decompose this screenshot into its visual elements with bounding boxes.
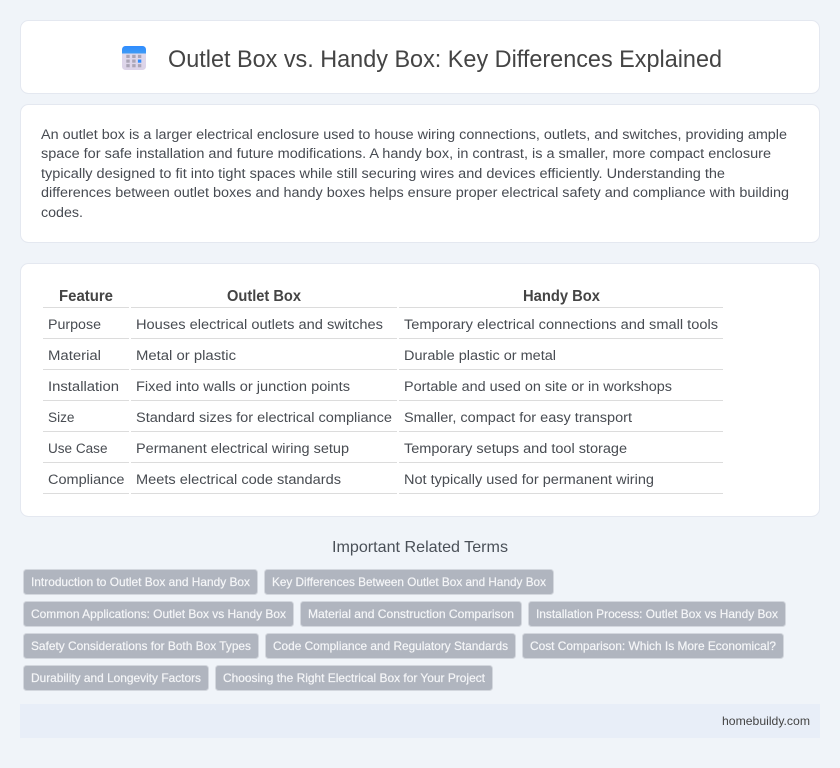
text block: introduction paragraph: An outlet box is a larger electrical enclosure used to house wiring connections, outlets, and switches, providing ample <box>41 127 787 143</box>
tag <box>24 602 294 626</box>
table row: purpose: Temporary electrical connections and small tools <box>404 317 718 333</box>
title: Outlet Box vs. Handy Box: Key Differences Explained <box>168 46 722 73</box>
panel: comparison table <box>20 264 820 516</box>
tag: Code Compliance and Regulatory Standards <box>273 639 508 653</box>
tag: Installation Process: Outlet Box vs Handy Box <box>536 607 778 621</box>
table row: size: Standard sizes for electrical compliance <box>136 410 392 426</box>
tag <box>24 570 258 594</box>
tag: Material and Construction Comparison <box>308 607 514 621</box>
table row: use case: Use Case <box>48 441 108 457</box>
table row: material <box>48 348 556 364</box>
tag <box>216 666 492 690</box>
table row: installation: Portable and used on site or in workshops <box>404 379 672 395</box>
related terms tags <box>24 570 786 690</box>
table row: material: Durable plastic or metal <box>404 348 556 364</box>
tag: Safety Considerations for Both Box Types <box>31 639 251 653</box>
text block: introduction paragraph: differences between outlet boxes and handy boxes helps ensure proper electrical safety and compliance with building <box>41 185 789 201</box>
panel: introduction <box>20 104 820 242</box>
tag: Common Applications: Outlet Box vs Handy Box <box>31 607 286 621</box>
table row: size: Size <box>48 410 75 426</box>
table header: Feature <box>59 288 113 305</box>
tag <box>24 666 208 690</box>
table row: installation: Installation <box>48 379 119 395</box>
table row: material: Material <box>48 348 101 364</box>
table header: Handy Box <box>523 288 600 305</box>
panel: title card <box>20 20 820 94</box>
footer: homebuildy.com <box>722 714 810 728</box>
text block: introduction paragraph <box>41 127 789 221</box>
table row: purpose <box>48 317 718 333</box>
table row: purpose: Purpose <box>48 317 101 333</box>
table row: purpose: Houses electrical outlets and switches <box>136 317 383 333</box>
tag: Cost Comparison: Which Is More Economical? <box>530 639 776 653</box>
table row: compliance: Compliance <box>48 472 125 488</box>
tag: Durability and Longevity Factors <box>31 671 201 685</box>
table row: installation <box>48 379 672 395</box>
text block: introduction paragraph: codes. <box>41 205 83 221</box>
text block: introduction paragraph: typically designed to fit into tight spaces while still securing wires and devices efficiently. Understanding the <box>41 166 725 182</box>
tag: Choosing the Right Electrical Box for Your Project <box>223 671 486 685</box>
table row: use case: Permanent electrical wiring setup <box>136 441 349 457</box>
tag <box>522 634 784 658</box>
table row: use case: Temporary setups and tool storage <box>404 441 627 457</box>
tag <box>264 570 554 594</box>
table header: Outlet Box <box>227 288 301 305</box>
icon: calendar <box>122 46 146 70</box>
table row: installation: Fixed into walls or junction points <box>136 379 350 395</box>
tag <box>266 634 516 658</box>
table row: compliance: Not typically used for permanent wiring <box>404 472 654 488</box>
text block: introduction paragraph: space for safe installation and future modifications. A handy box, in contrast, is a smaller, more compact enclosure <box>41 146 771 162</box>
tag <box>528 602 786 626</box>
table row: material: Metal or plastic <box>136 348 236 364</box>
table row: size <box>48 410 632 426</box>
table row: compliance: Meets electrical code standards <box>136 472 341 488</box>
footer <box>20 704 820 738</box>
table row: use case <box>48 441 627 457</box>
heading: important related terms: Important Related Terms <box>332 539 508 556</box>
tag <box>24 634 258 658</box>
table row: compliance <box>48 472 654 488</box>
table header <box>59 288 600 305</box>
tag: Introduction to Outlet Box and Handy Box <box>31 575 250 589</box>
tag <box>300 602 522 626</box>
table row: size: Smaller, compact for easy transport <box>404 410 632 426</box>
tag: Key Differences Between Outlet Box and Handy Box <box>272 575 546 589</box>
